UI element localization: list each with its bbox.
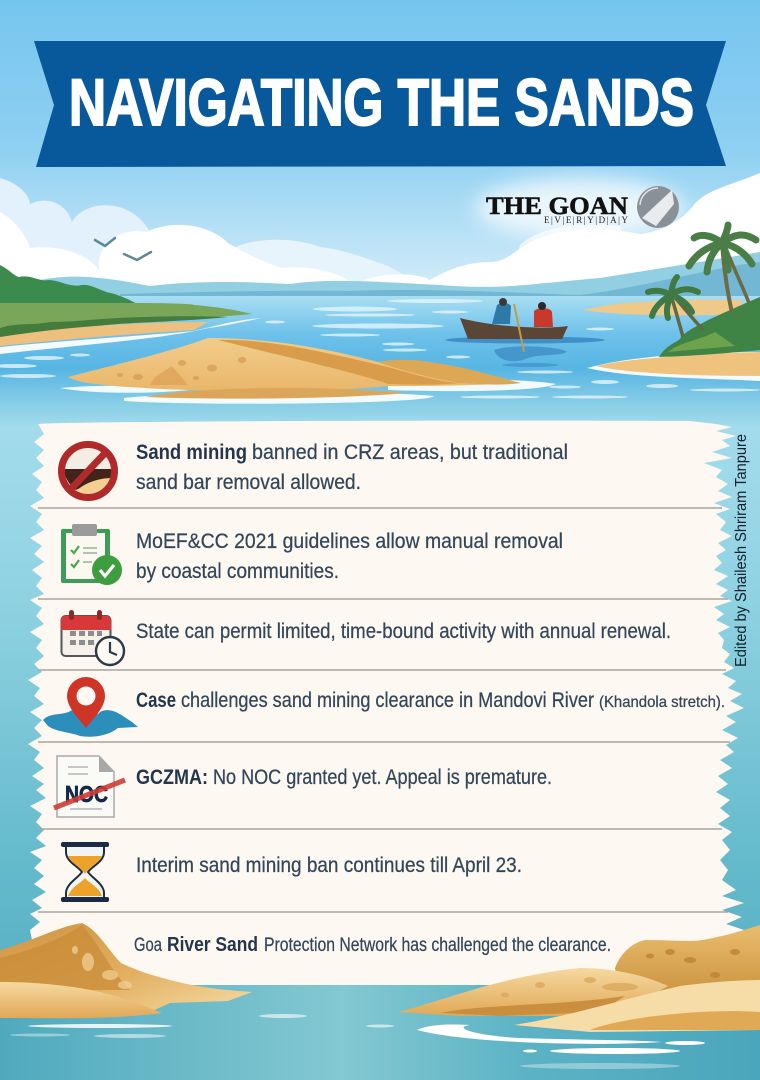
white torn-paper panel: [28, 421, 744, 985]
icon: NOC document crossed out: [54, 756, 125, 817]
icon: no mining sign: [62, 444, 114, 498]
row 1: sand mining ban: [62, 441, 568, 498]
row 6: interim ban: [61, 842, 522, 902]
row 7: network challenge: Protection Network has challenged the clearance.: [264, 935, 611, 956]
row 7: network challenge: Goa: [134, 935, 162, 956]
row 5: GCZMA: [54, 756, 552, 817]
text: row 1: [136, 441, 568, 494]
text: row 4: Case: [136, 689, 176, 712]
logo glow: [475, 178, 685, 238]
text: row 1: Sand mining: [136, 441, 247, 464]
right dunes: [398, 925, 760, 1032]
bottom dunes: [0, 923, 760, 1032]
sand bar: [60, 338, 556, 404]
logo: The Goan Everyday: [486, 186, 679, 228]
water highlights: [0, 299, 760, 398]
boat with rowers: [445, 298, 605, 367]
clouds: [0, 173, 760, 300]
mountains: [40, 252, 760, 300]
icon: calendar and clock: [61, 610, 124, 665]
left river bank: [0, 265, 262, 354]
logo: The Goan Everyday: E|V|E|R|Y|D|A|Y: [544, 215, 628, 225]
editor credit: Edited by Shailesh Shriram Tanpure: [733, 434, 750, 667]
icon: NOC document crossed out: NOC: [65, 781, 108, 807]
row 3: state permit: [61, 610, 671, 665]
row divider lines: [38, 508, 730, 912]
sky background: [0, 0, 760, 300]
text: row 5: GCZMA:: [136, 766, 208, 789]
icon: map pin in water: [43, 677, 138, 737]
text: row 2: by coastal communities.: [136, 560, 339, 583]
bottom sea: [0, 980, 760, 1080]
row 4: case challenge: [43, 677, 725, 737]
row 7: network challenge: [134, 934, 611, 956]
logo: The Goan Everyday: THE GOAN: [486, 193, 628, 220]
text: row 4: challenges sand mining clearance in Mandovi River: [181, 689, 594, 712]
title banner: [34, 41, 726, 167]
text: row 1: banned in CRZ areas, but traditional: [252, 441, 568, 464]
lower water background: [0, 426, 760, 1008]
text: row 2: MoEF&CC 2021 guidelines allow manual removal: [136, 530, 563, 553]
birds: [95, 238, 151, 260]
text: row 4: (Khandola stretch).: [599, 694, 725, 711]
text: row 2: [136, 530, 563, 583]
text: row 5: No NOC granted yet. Appeal is premature.: [213, 766, 552, 789]
right shore with palms: [582, 225, 760, 381]
text: row 6: Interim sand mining ban continues till April 23.: [136, 854, 522, 877]
icon: hourglass: [61, 842, 109, 902]
left dunes: [0, 923, 252, 1018]
text: row 1: sand bar removal allowed.: [136, 471, 361, 494]
row 2: guidelines: [61, 524, 563, 585]
text: row 3: State can permit limited, time-bound activity with annual renewal.: [136, 620, 671, 643]
icon: clipboard with check: [61, 524, 122, 585]
river water: [0, 296, 760, 428]
row 7: network challenge: River Sand: [167, 934, 258, 956]
